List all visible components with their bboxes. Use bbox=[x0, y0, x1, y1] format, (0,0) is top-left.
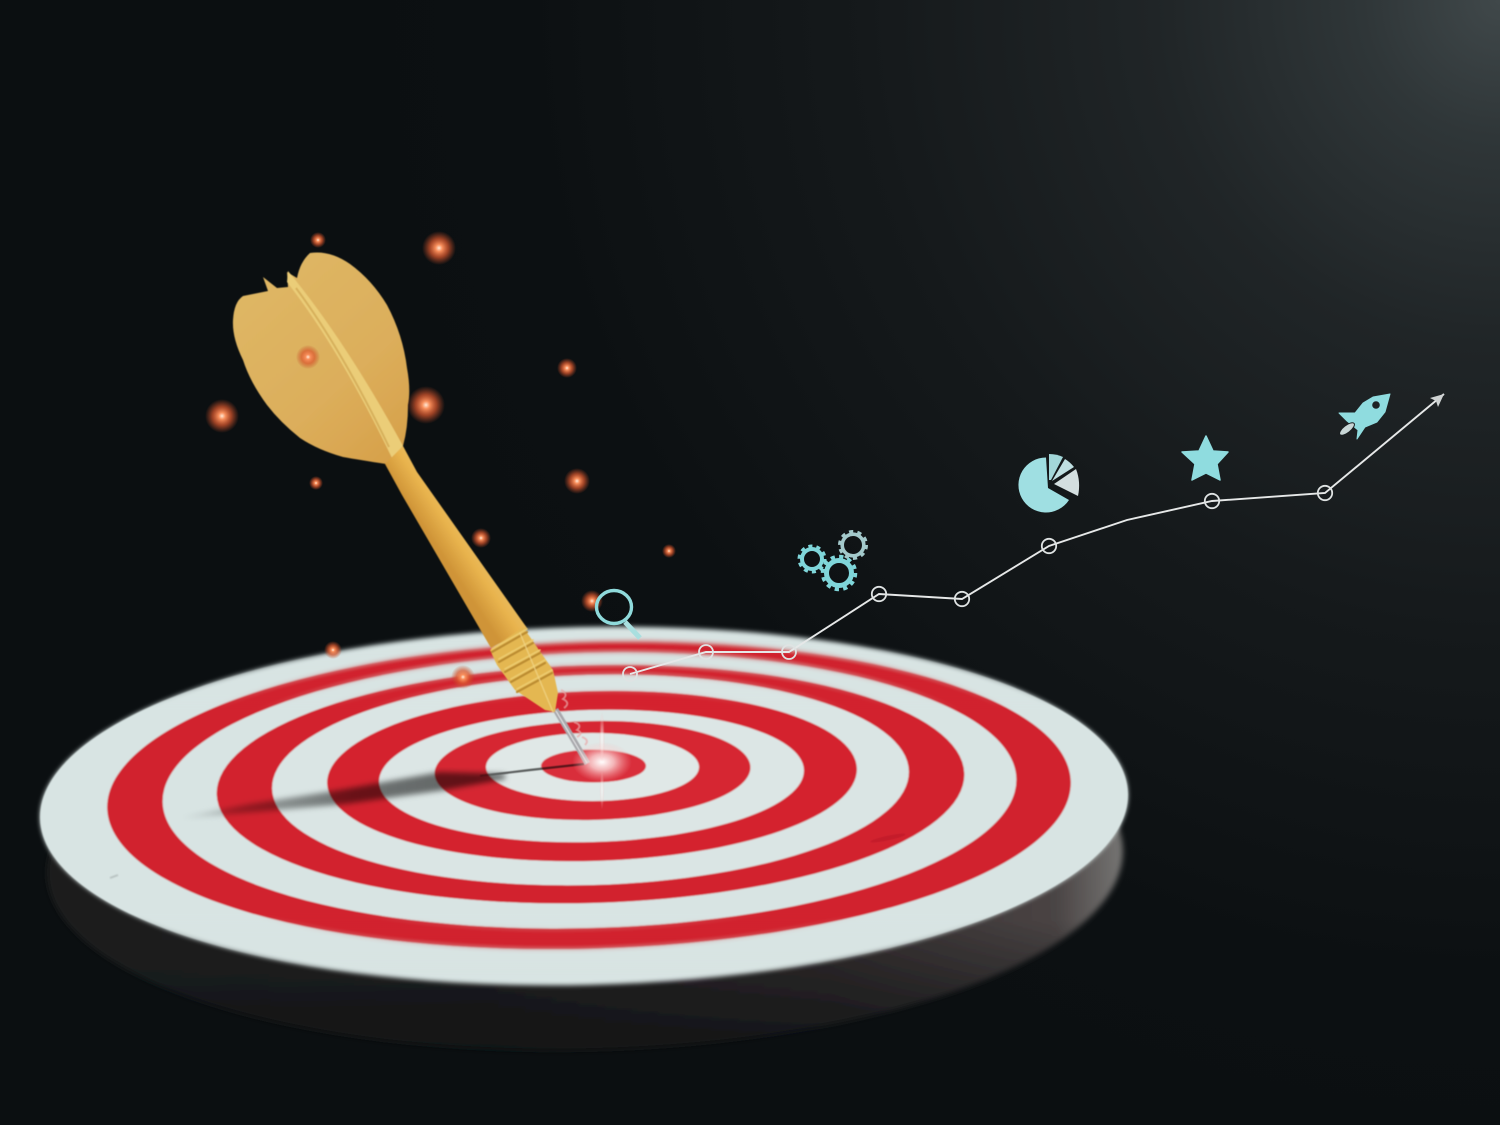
trend line bbox=[630, 394, 1444, 674]
sparkles bbox=[205, 231, 676, 689]
dart bbox=[233, 252, 590, 765]
dart needle bbox=[553, 690, 590, 765]
dart flight bbox=[233, 252, 409, 464]
dartboard bbox=[36, 615, 1132, 1062]
node markers bbox=[623, 486, 1332, 681]
board face rings bbox=[36, 615, 1132, 997]
board side wall bbox=[43, 662, 1127, 1062]
icon: magnifying glass bbox=[596, 590, 640, 638]
arrow head bbox=[1430, 394, 1444, 407]
icon: gears bbox=[799, 532, 866, 590]
icon: pie chart bbox=[1018, 454, 1079, 513]
icon: star bbox=[1182, 436, 1228, 480]
growth line chart bbox=[623, 394, 1444, 681]
dart barrel bbox=[490, 627, 558, 712]
icon: rocket bbox=[1338, 394, 1390, 439]
dart shadow on board bbox=[180, 764, 584, 818]
dart shaft bbox=[385, 446, 527, 648]
impact flash bbox=[572, 712, 632, 810]
